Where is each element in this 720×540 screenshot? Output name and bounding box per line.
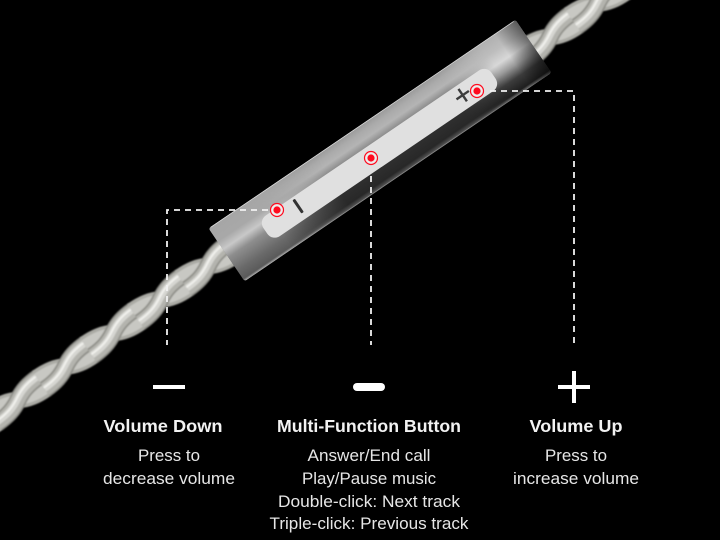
minus mark on button bbox=[292, 199, 304, 214]
icon: pill button bbox=[353, 383, 385, 391]
plus mark on button bbox=[452, 85, 473, 106]
cable: lower left braided wire bbox=[0, 221, 263, 463]
text block: volume down: decrease volume bbox=[103, 470, 235, 488]
text block: multi-function button: Multi-Function Button bbox=[277, 416, 461, 436]
text block: multi-function button: Triple-click: Previous track bbox=[270, 515, 469, 533]
text block: volume down: Volume Down bbox=[104, 416, 222, 436]
text block: multi-function button bbox=[270, 416, 469, 533]
marker: volume down bbox=[270, 204, 284, 216]
cable: upper right braided wire bbox=[517, 0, 700, 66]
text block: multi-function button: Answer/End call bbox=[308, 447, 430, 465]
marker: volume up bbox=[470, 84, 484, 98]
leader line: volume up bbox=[490, 91, 574, 347]
leader line: volume down bbox=[167, 210, 268, 345]
button strip bbox=[258, 65, 501, 241]
module top rim highlight bbox=[211, 22, 514, 227]
leader line: multi-function bbox=[370, 176, 372, 345]
module body bbox=[209, 20, 551, 281]
text block: volume down bbox=[103, 416, 235, 488]
text block: volume up: Volume Up bbox=[530, 416, 622, 436]
text block: volume up bbox=[513, 416, 639, 488]
module left end shading bbox=[210, 170, 341, 280]
text block: multi-function button: Play/Pause music bbox=[302, 470, 436, 488]
text block: volume up: increase volume bbox=[513, 470, 639, 488]
remote control module bbox=[209, 20, 551, 281]
module right tip darkening bbox=[494, 20, 551, 87]
icon: plus bbox=[558, 371, 590, 403]
text block: multi-function button: Double-click: Next track bbox=[278, 493, 461, 511]
text block: volume up: Press to bbox=[545, 447, 607, 465]
marker: multi-function bbox=[364, 152, 378, 164]
icon: minus bbox=[153, 385, 185, 389]
text block: volume down: Press to bbox=[138, 447, 200, 465]
module right end shading bbox=[446, 20, 550, 118]
